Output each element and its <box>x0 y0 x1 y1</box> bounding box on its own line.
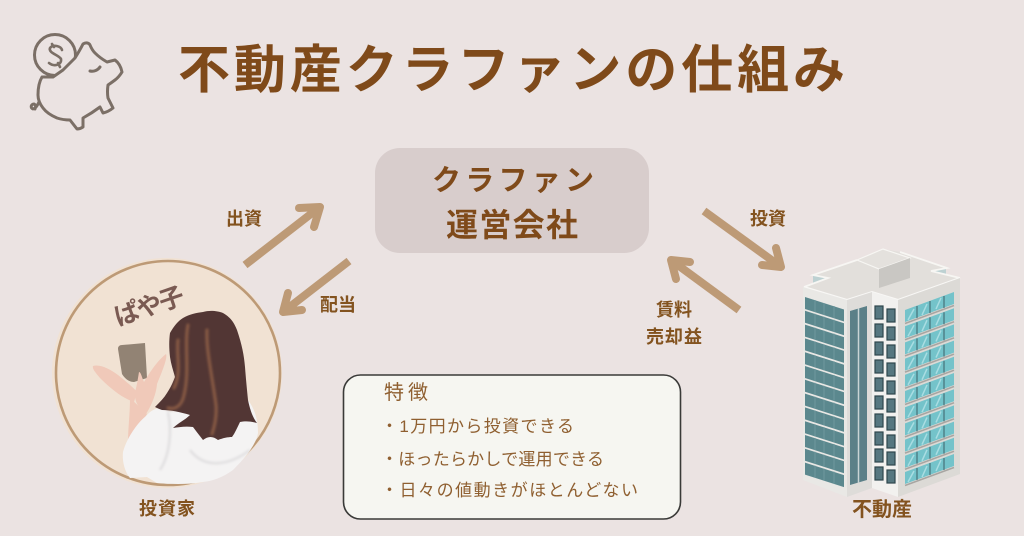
label: 配当: 配当 <box>320 295 356 315</box>
arm and hands <box>93 354 166 442</box>
panel: features: ・日々の値動きがほとんどない <box>381 481 638 500</box>
left face <box>803 287 847 497</box>
mid face <box>872 292 898 497</box>
icon: piggy bank with coin <box>31 34 122 129</box>
arrow: investment to property <box>704 211 781 267</box>
arrow: investment to operator <box>245 207 320 265</box>
panel: features: 特徴 <box>384 381 428 404</box>
arrow: rent and sale proceeds <box>671 260 739 310</box>
panel: features <box>344 375 680 519</box>
panel: investor portrait <box>52 258 282 488</box>
label: 出資: 出資 <box>226 209 262 229</box>
roof <box>813 275 828 283</box>
wallet <box>118 343 147 382</box>
icon: office tower <box>803 249 960 497</box>
right face <box>898 278 960 497</box>
panel: features: ・1万円から投資できる <box>381 417 574 436</box>
left windows <box>805 297 844 487</box>
recessed face <box>847 292 872 497</box>
panel: crowdfunding operator: 運営会社 <box>446 207 578 243</box>
long brown hair <box>155 311 257 440</box>
label: 投資: 投資 <box>750 209 786 229</box>
label: rent and sale proceeds: 賃料 <box>656 300 692 320</box>
arrow: dividends to investor <box>283 261 349 312</box>
panel: features: ・ほったらかしで運用できる <box>381 450 604 469</box>
label: rent and sale proceeds: 売却益 <box>646 327 702 347</box>
label: rent and sale proceeds <box>646 300 702 347</box>
right windows <box>905 292 954 486</box>
white shirt <box>123 397 258 484</box>
title: 不動産クラファンの仕組み <box>178 42 845 100</box>
label: 投資家: 投資家 <box>139 499 195 519</box>
panel: crowdfunding operator: クラファン <box>432 165 594 197</box>
name: ぱや子: ぱや子 <box>111 282 188 332</box>
label: 不動産: 不動産 <box>852 498 912 521</box>
panel: crowdfunding operator <box>375 148 649 253</box>
middle windows <box>875 306 895 483</box>
